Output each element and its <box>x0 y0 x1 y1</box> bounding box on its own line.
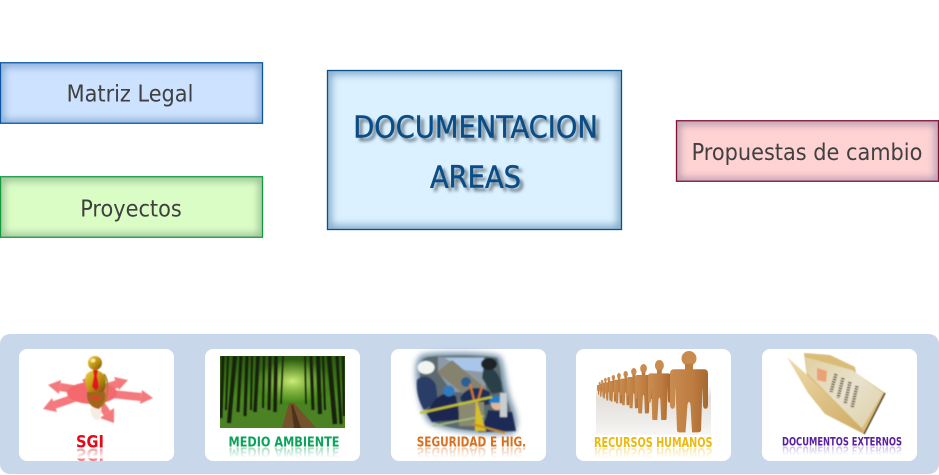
label: SEGURIDAD E HIG.: SEGURIDAD E HIG. <box>417 435 526 451</box>
box: DOCUMENTACION AREAS: DOCUMENTACION <box>353 110 598 146</box>
box: Matriz Legal: Matriz Legal <box>67 81 193 108</box>
box: DOCUMENTACION AREAS: AREAS <box>433 164 525 199</box>
card: DOCUMENTOS EXTERNOS <box>762 349 917 461</box>
label: SEGURIDAD E HIG. <box>413 435 530 460</box>
label: MEDIO AMBIENTE: MEDIO AMBIENTE <box>228 435 340 451</box>
image: row of people <box>596 351 711 435</box>
label: RECURSOS HUMANOS: RECURSOS HUMANOS <box>594 435 712 451</box>
label: DOCUMENTOS EXTERNOS <box>778 434 906 457</box>
card: SEGURIDAD E HIG. <box>391 349 546 461</box>
label: DOCUMENTOS EXTERNOS: DOCUMENTOS EXTERNOS <box>782 443 902 457</box>
card: RECURSOS HUMANOS <box>576 349 731 461</box>
box: DOCUMENTACION AREAS <box>328 70 622 230</box>
box: Matriz Legal <box>0 63 262 124</box>
box: DOCUMENTACION AREAS: DOCUMENTACION <box>357 114 601 149</box>
box: Propuestas de cambio: Propuestas de cambio <box>692 139 922 166</box>
label: RECURSOS HUMANOS <box>590 435 716 460</box>
label: SGI <box>70 432 110 464</box>
box: DOCUMENTACION AREAS: AREAS <box>430 160 521 196</box>
image: open folder <box>787 353 885 434</box>
image: forest <box>220 356 345 428</box>
card: MEDIO AMBIENTE <box>205 349 360 461</box>
label: SEGURIDAD E HIG.: SEGURIDAD E HIG. <box>417 444 526 460</box>
image: safety workers <box>416 352 517 434</box>
panel: areas <box>0 334 939 474</box>
card: SGI <box>19 349 174 464</box>
label: SGI: SGI <box>76 444 104 464</box>
label: MEDIO AMBIENTE: MEDIO AMBIENTE <box>228 444 340 460</box>
box: Propuestas de cambio <box>676 121 938 182</box>
box: Proyectos <box>0 177 262 238</box>
label: DOCUMENTOS EXTERNOS: DOCUMENTOS EXTERNOS <box>782 434 902 448</box>
label: MEDIO AMBIENTE <box>225 435 343 460</box>
label: SGI: SGI <box>76 432 104 452</box>
box: Proyectos: Proyectos <box>80 196 182 222</box>
label: RECURSOS HUMANOS: RECURSOS HUMANOS <box>594 444 712 460</box>
icon: figure on red arrows <box>43 356 153 423</box>
